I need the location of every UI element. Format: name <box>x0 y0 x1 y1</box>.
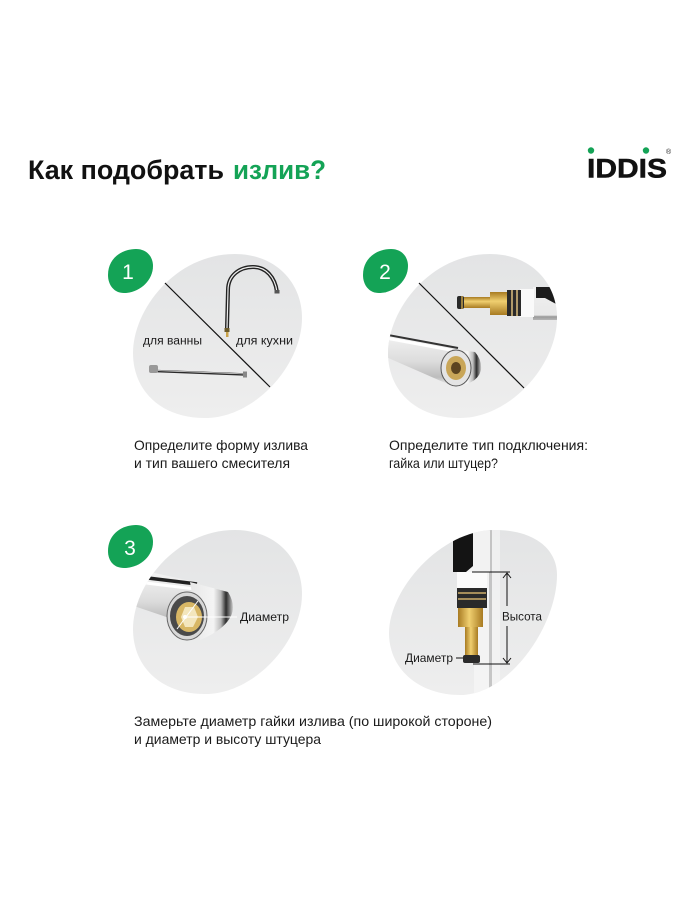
panel: step 2 connection type <box>386 254 559 418</box>
text: step 3 instructions: и диаметр и высоту штуцера <box>134 731 321 747</box>
badge 1: 1 <box>122 261 134 284</box>
blob background 3 <box>133 530 302 694</box>
label: for kitchen: для кухни <box>236 336 293 348</box>
badge 2: 2 <box>379 261 391 284</box>
logo: IDDIS: IDDIS <box>587 154 667 184</box>
text: step 3 instructions: Замерьте диаметр гайки излива (по широкой стороне) <box>134 713 492 729</box>
text: step 1 instructions: и тип вашего смесителя <box>134 455 290 471</box>
icon: spout nut close-up <box>134 572 233 640</box>
icon: vertical fitting <box>453 530 500 688</box>
height dimension <box>472 572 511 664</box>
label: nut diameter: Диаметр <box>240 610 289 624</box>
text: step 2 instructions: Определите тип подключения: <box>389 437 588 453</box>
badge 2 <box>363 249 408 293</box>
text: step 1 instructions <box>134 437 308 471</box>
title: Как подобрать <box>28 155 224 185</box>
text: step 2 instructions: гайка или штуцер? <box>389 455 498 471</box>
text: step 2 instructions <box>389 437 588 471</box>
divider line 1 <box>165 283 270 387</box>
logo: IDDIS: ® <box>666 148 672 156</box>
label: height: Высота <box>502 610 542 624</box>
divider line 2 <box>419 283 524 388</box>
title <box>28 155 326 185</box>
title: излив? <box>233 155 326 185</box>
text: step 3 instructions <box>134 713 492 747</box>
panel: step 1 spout shape <box>133 254 302 418</box>
panel: fitting measurements <box>389 525 557 700</box>
icon: threaded fitting <box>457 287 559 320</box>
panel: step 3 nut diameter <box>133 530 302 694</box>
label: for bath: для ванны <box>143 336 202 348</box>
icon: bath spout <box>149 365 247 378</box>
blob background 4 <box>389 530 557 695</box>
blob background 2 <box>388 254 557 418</box>
diameter tick <box>456 657 463 659</box>
badge 3: 3 <box>124 537 136 560</box>
icon: nut spout <box>386 333 481 386</box>
blob background 1 <box>133 254 302 418</box>
label: fitting diameter: Диаметр <box>405 651 453 665</box>
diameter marker <box>177 601 237 629</box>
badge 3 <box>108 525 153 568</box>
text: step 1 instructions: Определите форму излива <box>134 437 308 453</box>
badge 1 <box>108 249 153 293</box>
icon: kitchen spout <box>224 267 280 337</box>
